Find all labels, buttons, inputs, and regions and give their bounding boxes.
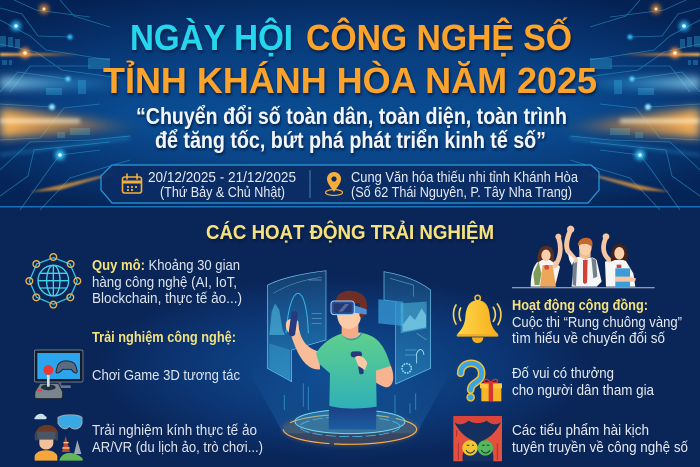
icon: game screen and joystick — [34, 350, 83, 399]
subheading: tech experience: Trải nghiệm công nghệ: — [92, 330, 236, 346]
light bars — [284, 383, 416, 413]
icon: global network — [26, 254, 81, 308]
title — [103, 16, 597, 101]
text: scale — [92, 258, 242, 307]
ground line — [512, 287, 655, 288]
slogan — [136, 103, 567, 153]
student center — [567, 226, 602, 287]
circuit decoration right — [555, 0, 700, 210]
text: quiz — [512, 366, 655, 399]
date text: (Thứ Bảy & Chủ Nhật) — [160, 185, 285, 201]
text: comedy sketches: Các tiểu phẩm hài kịch — [512, 423, 649, 439]
text: AR/VR: AR/VR (du lịch ảo, trò chơi...) — [92, 440, 263, 456]
left bent arm — [357, 356, 393, 387]
text: quiz: Đố vui có thưởng — [512, 366, 614, 382]
venue text — [351, 170, 579, 201]
text: AR/VR: Trải nghiệm kính thực tế ảo — [92, 423, 257, 439]
text: scale: Blockchain, thực tế ảo...) — [92, 291, 242, 307]
student right — [603, 233, 636, 287]
central VR illustration — [247, 271, 453, 447]
neck and face — [342, 323, 358, 339]
text: scale: hàng công nghệ (AI, IoT, — [92, 275, 237, 291]
illustration: three students — [512, 226, 655, 288]
icon: bell — [453, 295, 501, 343]
hand left controller — [286, 319, 299, 334]
icon: stage curtains and masks — [453, 416, 502, 461]
text: comedy sketches — [512, 423, 688, 456]
icon: question and gift — [461, 363, 502, 401]
date text: 20/12/2025 - 21/12/2025 — [148, 170, 296, 186]
hologram beam — [247, 367, 453, 433]
hand right controller — [351, 351, 362, 357]
legs — [329, 403, 377, 429]
hair — [336, 291, 367, 318]
text: community activities: Hoạt động cộng đồng: — [512, 298, 648, 314]
venue text: Cung Văn hóa thiếu nhi tỉnh Khánh Hòa — [351, 170, 579, 186]
headset — [353, 305, 367, 315]
platform rings — [282, 410, 418, 447]
background: lower panel — [0, 208, 700, 467]
slogan: để tăng tốc, bứt phá phát triển kinh tế số” — [155, 127, 546, 153]
hologram panel right — [378, 272, 431, 384]
person — [286, 291, 393, 429]
title: TỈNH KHÁNH HÒA NĂM 2025 — [103, 59, 597, 101]
header band — [0, 0, 700, 210]
venue text: (Số 62 Thái Nguyên, P. Tây Nha Trang) — [351, 185, 572, 201]
right raised arm — [290, 330, 320, 369]
info bar: date and venue — [101, 165, 599, 203]
text: quiz: cho người dân tham gia — [512, 383, 655, 399]
text: scale: Quy mô: Khoảng 30 gian — [92, 258, 240, 274]
date text — [148, 170, 296, 201]
icon: location pin — [326, 172, 342, 196]
text: community activities: tìm hiểu về chuyển đổi số — [512, 331, 665, 347]
text: community activities — [512, 298, 682, 347]
title: NGÀY HỘI — [130, 16, 293, 58]
title: CÔNG NGHỆ SỐ — [306, 16, 572, 58]
section heading: CÁC HOẠT ĐỘNG TRẢI NGHIỆM — [206, 220, 494, 244]
text: community activities: Cuộc thi “Rung chuông vàng” — [512, 315, 682, 331]
student left — [531, 234, 561, 287]
icon: VR user with landmarks — [34, 414, 83, 461]
torso shirt — [316, 333, 391, 409]
hologram panel left — [267, 271, 326, 382]
text: 3D game: Chơi Game 3D tương tác — [92, 368, 240, 384]
slogan: “Chuyển đổi số toàn dân, toàn diện, toàn trình — [136, 103, 567, 129]
text: comedy sketches: tuyên truyền về công nghệ số — [512, 440, 688, 456]
circuit decoration left — [0, 0, 145, 210]
text: AR/VR — [92, 423, 263, 456]
icon: calendar — [122, 174, 142, 193]
